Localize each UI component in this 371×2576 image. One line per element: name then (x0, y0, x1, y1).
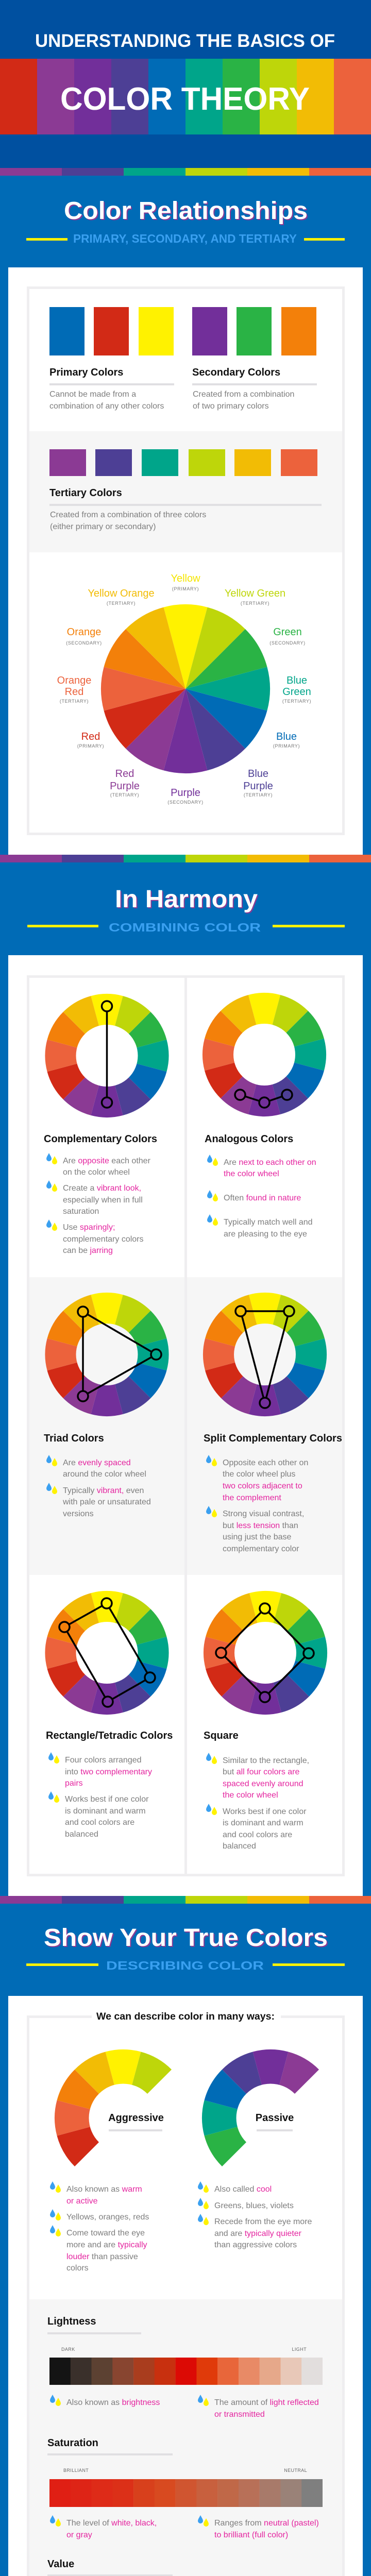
tertiary colors block (29, 431, 342, 552)
bullets: rectangle: Works best if one color (65, 1795, 149, 1804)
wheel labels: Orange (67, 626, 101, 638)
primary colors block: Primary Colors (49, 367, 123, 378)
block: saturation: The level of white, black, (66, 2519, 157, 2528)
bullets: rectangle: and cool colors are (65, 1818, 134, 1827)
bullets: split complementary: the color wheel plus (223, 1470, 295, 1479)
bullets: split complementary: using just the base (223, 1533, 292, 1541)
block: lightness: or transmitted (214, 2410, 265, 2419)
wheel labels: Purple (171, 787, 200, 799)
tertiary colors block: (either primary or secondary) (50, 522, 156, 531)
bullets: complementary: saturation (63, 1207, 99, 1216)
icon: analogous wheel (203, 993, 326, 1116)
bullets: square: Works best if one color (223, 1807, 307, 1816)
bullets: complementary: Create a vibrant look, (63, 1184, 141, 1193)
chart: passive half wheel: Passive (256, 2112, 294, 2124)
bullets: analogous: Are next to each other on (224, 1158, 316, 1167)
bullets: complementary: especially when in full (63, 1196, 143, 1205)
bullets: complementary: Use sparingly; (63, 1223, 115, 1232)
heading: In Harmony: In Harmony (115, 886, 258, 913)
bullets: triad: around the color wheel (63, 1470, 146, 1479)
wheel labels: (TERTIARY) (282, 699, 311, 704)
block: lightness: Also known as brightness (66, 2398, 160, 2407)
wheel labels: (PRIMARY) (77, 743, 104, 749)
bullets: triad: versions (63, 1510, 94, 1518)
block: saturation: or gray (66, 2531, 92, 2539)
bullets: triad: Typically vibrant, even (63, 1486, 144, 1495)
bullets: split complementary: complementary color (223, 1545, 299, 1553)
block: saturation: BRILLIANT (63, 2468, 89, 2473)
heading: Color Relationships: Color Relationships (64, 197, 308, 225)
card: square colors: Square (204, 1730, 239, 1741)
panel: color relationships (8, 267, 363, 855)
bullets: aggressive: Also known as warm (66, 2185, 142, 2194)
wheel labels: Yellow Orange (88, 588, 155, 599)
wheel labels: (TERTIARY) (241, 601, 269, 606)
bullets: aggressive: or active (66, 2197, 98, 2206)
bullets: split complementary: Opposite each other on (223, 1459, 308, 1467)
bullets: square (206, 1753, 309, 1851)
block: lightness (47, 2316, 323, 2419)
block: lightness: The amount of light reflected (214, 2398, 319, 2407)
bullets: passive: Recede from the eye more (214, 2217, 312, 2226)
primary colors block: Cannot be made from a (49, 390, 136, 399)
bullets: passive: than aggressive colors (214, 2241, 297, 2249)
block: lightness: DARK (61, 2347, 75, 2352)
bullets: aggressive: more and are typically (66, 2241, 147, 2249)
chart: passive half wheel (202, 2049, 319, 2166)
heading: Color Relationships: Color Relationships (65, 198, 309, 226)
section background: color relationships (0, 176, 371, 855)
panel: describing color (8, 1996, 363, 2576)
subheading: describing color: DESCRIBING COLOR (106, 1959, 264, 1972)
bullets: triad: Are evenly spaced (63, 1459, 131, 1467)
card: triad colors (44, 1293, 169, 1518)
subheading: combining color (27, 921, 345, 934)
card: triad colors: Triad Colors (44, 1433, 104, 1444)
heading: Show Your True Colors: Show Your True Colors (44, 1924, 328, 1952)
wheel labels: Purple (243, 781, 273, 792)
stripe band 3 (0, 1896, 371, 1904)
panel: harmony (8, 955, 363, 1896)
primary colors block (49, 307, 174, 411)
bullets: analogous: Typically match well and (224, 1218, 313, 1227)
bullets: analogous: are pleasing to the eye (224, 1230, 307, 1239)
bullets: rectangle: Four colors arranged (65, 1756, 142, 1765)
bullets: aggressive (50, 2181, 149, 2273)
wheel labels: (TERTIARY) (110, 792, 139, 798)
bullets: rectangle (48, 1752, 152, 1839)
bullets: passive: and are typically quieter (214, 2229, 302, 2238)
bullets: split complementary: two colors adjacent to (223, 1482, 302, 1490)
chart: main color wheel (101, 604, 270, 773)
stripe band 1 (0, 168, 371, 176)
bullets: rectangle: pairs (65, 1779, 83, 1788)
stripe band 2 (0, 855, 371, 862)
bullets: passive: Also called cool (214, 2185, 272, 2194)
intro text: We can describe color in many ways: (96, 2011, 275, 2022)
bullets: rectangle: is dominant and warm (65, 1807, 146, 1816)
bullets: aggressive: Yellows, oranges, reds (66, 2213, 149, 2222)
block: saturation: NEUTRAL (284, 2468, 307, 2473)
chart: aggressive half wheel (55, 2049, 172, 2166)
wheel labels: (PRIMARY) (172, 586, 199, 591)
block: lightness: LIGHT (292, 2347, 307, 2352)
bullets: split complementary: but less tension than (223, 1521, 298, 1530)
card: square colors (204, 1591, 327, 1851)
wheel labels: (TERTIARY) (107, 601, 136, 606)
bullets: split complementary: Strong visual contrast, (223, 1510, 304, 1518)
bullets: aggressive: Come toward the eye (66, 2229, 145, 2238)
block: value: Value (47, 2558, 74, 2570)
heading: Show Your True Colors: Show Your True Colors (45, 1925, 329, 1953)
wheel labels (57, 573, 311, 805)
secondary colors block: Created from a combination (193, 390, 294, 399)
bullets: square: is dominant and warm (223, 1819, 303, 1827)
tertiary colors block: Tertiary Colors (49, 487, 122, 499)
bullets: complementary: can be jarring (63, 1246, 113, 1255)
secondary colors block: of two primary colors (193, 402, 269, 411)
wheel labels: Green (273, 626, 302, 638)
chart: aggressive half wheel: Aggressive (108, 2112, 164, 2124)
secondary colors block (192, 307, 317, 411)
block: saturation: Saturation (47, 2437, 98, 2449)
wheel labels: Yellow (171, 573, 200, 584)
wheel labels: Blue (248, 768, 268, 779)
title line 1: UNDERSTANDING THE BASICS OF (35, 31, 335, 51)
bullets: square: spaced evenly around (223, 1780, 303, 1788)
bullets: triad (46, 1455, 151, 1518)
bullets: rectangle: balanced (65, 1830, 98, 1839)
secondary colors block: Secondary Colors (192, 367, 280, 378)
block: value (47, 2558, 323, 2576)
card: split complementary colors: Split Complementary Colors (204, 1433, 342, 1444)
tertiary colors block: Created from a combination of three colors (50, 511, 206, 519)
bullets: analogous: the color wheel (224, 1170, 279, 1178)
icon: square wheel (204, 1591, 327, 1715)
wheel labels: Orange (57, 675, 91, 686)
bullets: aggressive: colors (66, 2264, 89, 2273)
card: complementary colors: Complementary Colors (44, 1133, 157, 1145)
bullets: complementary: complementary colors (63, 1235, 143, 1244)
wheel labels: Blue (276, 731, 297, 742)
bullets: rectangle: into two complementary (65, 1768, 152, 1776)
bullets: complementary: Are opposite each other (63, 1157, 151, 1165)
primary colors block: combination of any other colors (49, 402, 164, 411)
bullets: complementary: on the color wheel (63, 1168, 130, 1177)
card: rectangle tetradic colors: Rectangle/Tetradic Colors (46, 1730, 173, 1741)
card: complementary colors (44, 994, 169, 1255)
wheel labels: Red (115, 768, 134, 779)
subheading: primary secondary tertiary: PRIMARY, SECONDARY, AND TERTIARY (73, 232, 297, 245)
wheel labels: (SECONDARY) (66, 640, 102, 646)
bullets: passive (198, 2181, 312, 2249)
card: analogous colors (203, 993, 326, 1239)
bullets: split complementary (206, 1455, 308, 1553)
block: saturation (47, 2437, 323, 2539)
bullets: square: Similar to the rectangle, (223, 1756, 309, 1765)
chart: lightness bar (49, 2358, 323, 2385)
icon: complementary wheel (45, 994, 169, 1117)
wheel labels: (TERTIARY) (60, 699, 89, 704)
wheel labels: Blue (286, 675, 307, 686)
header (0, 0, 371, 168)
block: saturation: Ranges from neutral (pastel) (214, 2519, 319, 2528)
bullets: triad: with pale or unsaturated (62, 1498, 151, 1506)
bullets: square: and cool colors are (223, 1831, 292, 1839)
wheel labels: Yellow Green (225, 588, 285, 599)
card: analogous colors: Analogous Colors (205, 1133, 293, 1145)
subheading: combining color: COMBINING COLOR (109, 921, 261, 934)
card: split complementary colors (203, 1293, 342, 1553)
chart: saturation bar (49, 2479, 323, 2507)
wheel labels: (TERTIARY) (244, 792, 273, 798)
bullets: split complementary: the complement (223, 1494, 281, 1502)
title line 2: COLOR THEORY (60, 81, 310, 117)
bullets: analogous: Often found in nature (224, 1194, 301, 1202)
block: saturation: to brilliant (full color) (214, 2531, 288, 2539)
bullets: passive: Greens, blues, violets (214, 2201, 294, 2210)
block: lightness: Lightness (47, 2316, 96, 2327)
icon: split complementary wheel (203, 1293, 327, 1416)
bullets: square: the color wheel (223, 1791, 278, 1800)
section background: in harmony (0, 862, 371, 1896)
wheel labels: (SECONDARY) (269, 640, 306, 646)
wheel labels: Green (282, 686, 311, 698)
card: rectangle tetradic colors (45, 1591, 173, 1839)
wheel labels: Red (65, 686, 83, 698)
subheading: describing color (26, 1959, 345, 1972)
bullets: analogous (207, 1155, 316, 1239)
heading: In Harmony: In Harmony (116, 887, 259, 914)
section background: true colors (0, 1904, 371, 2576)
icon: rectangle wheel (45, 1591, 169, 1715)
wheel labels: Red (81, 731, 100, 742)
bullets: complementary (46, 1153, 151, 1255)
wheel labels: Purple (110, 781, 140, 792)
wheel labels: (SECONDARY) (167, 800, 204, 805)
icon: triad wheel (45, 1293, 169, 1416)
bullets: square: balanced (223, 1842, 256, 1851)
wheel labels: (PRIMARY) (273, 743, 300, 749)
bullets: square: but all four colors are (223, 1768, 300, 1776)
bullets: aggressive: louder than passive (66, 2252, 138, 2261)
